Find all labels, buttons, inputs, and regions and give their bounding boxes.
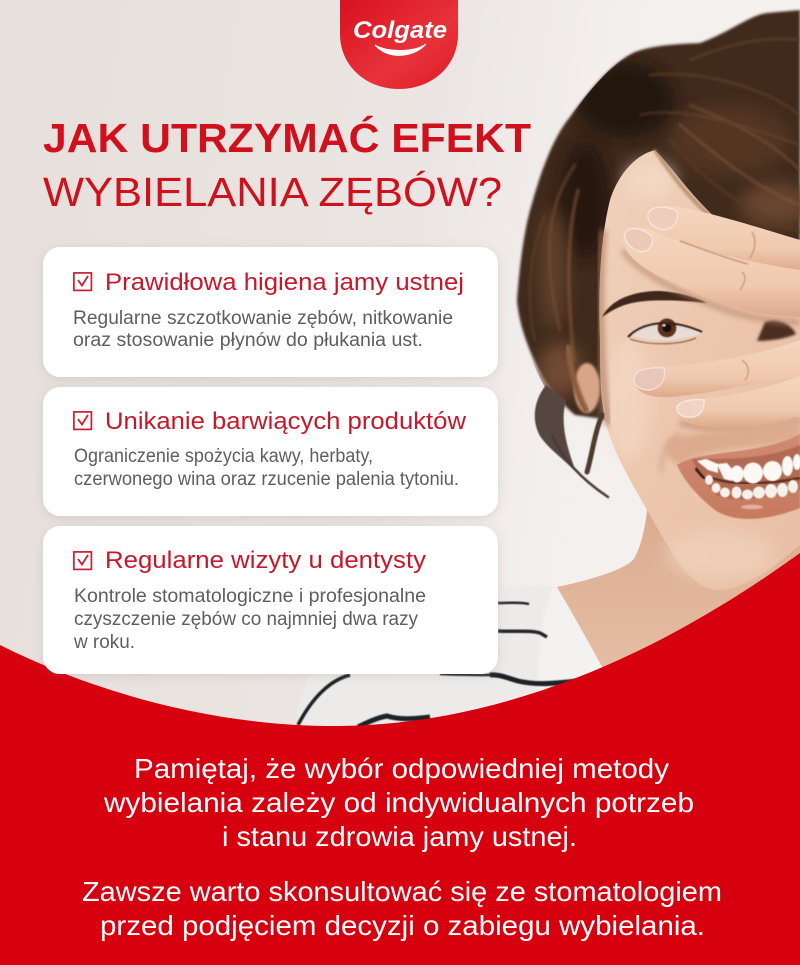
text block: czyszczenie zębów co najmniej dwa razy: [74, 609, 418, 630]
eyebrow: [602, 291, 707, 317]
text block: Ograniczenie spożycia kawy, herbaty,: [74, 446, 373, 467]
face: [599, 150, 800, 590]
heading: Prawidłowa higiena jamy ustnej: [105, 269, 464, 296]
skin above the lip: [666, 418, 800, 465]
icon: checkbox: [74, 412, 91, 429]
closing text: choice of method: [103, 753, 694, 852]
gap between the fingers: [757, 320, 796, 341]
closing text: consult a dentist: Zawsze warto skonsultować się ze stomatologiem: [82, 876, 722, 907]
text block: czerwonego wina oraz rzucenie palenia tytoniu.: [74, 469, 459, 490]
lower lip highlight: [741, 505, 763, 509]
ear and strands over it: [568, 345, 600, 413]
nails on upper fingers: [648, 207, 678, 229]
lower teeth: [705, 475, 798, 500]
photo: woman covering one eye with her hand: [295, 10, 800, 730]
upper teeth: [697, 454, 800, 484]
upper fingers: [623, 206, 800, 317]
shirt stripes: [298, 603, 577, 727]
shirt with stripes: [295, 585, 620, 730]
neck: [557, 500, 800, 672]
face shading: [606, 340, 650, 460]
text block: [73, 308, 453, 351]
closing text: choice of method: wybielania zależy od indywidualnych potrzeb: [103, 787, 694, 818]
panel: staining products: [43, 387, 498, 516]
lips: [677, 434, 800, 519]
logo badge: [340, 0, 458, 89]
icon: checkbox: [74, 552, 91, 569]
text block: w roku.: [73, 632, 135, 653]
panel: oral hygiene: [43, 247, 498, 377]
shadow under the upper fingers: [623, 250, 800, 322]
text block: Kontrole stomatologiczne i profesjonalne: [74, 586, 426, 607]
crease beside the mouth: [662, 432, 680, 472]
hair shading: [538, 62, 800, 398]
title: JAK UTRZYMAĆ EFEKT: [43, 115, 531, 161]
icon: checkbox: [74, 273, 91, 290]
smile: [662, 418, 800, 519]
text block: [74, 446, 459, 490]
mouth interior: [692, 445, 800, 499]
title: WYBIELANIA ZĘBÓW?: [43, 169, 502, 215]
nails on lower fingers: [634, 368, 664, 390]
text block: oraz stosowanie płynów do płukania ust.: [73, 330, 423, 351]
text block: [73, 586, 426, 653]
text block: Regularne szczotkowanie zębów, nitkowanie: [73, 308, 453, 329]
hair mass: [517, 10, 800, 420]
title: [43, 115, 531, 215]
closing text: consult a dentist: [82, 876, 722, 941]
panel: dentist visits: [43, 526, 498, 674]
eye: [628, 318, 702, 344]
shadow under the lower fingers: [680, 420, 800, 429]
closing text: choice of method: Pamiętaj, że wybór odpowiedniej metody: [134, 753, 669, 784]
logo smile: [375, 44, 426, 55]
lower fingers: [634, 340, 800, 428]
red curved panel: [0, 553, 800, 965]
closing text: consult a dentist: przed podjęciem decyzji o zabiegu wybielania.: [100, 910, 705, 941]
closing text: choice of method: i stanu zdrowia jamy ustnej.: [222, 821, 577, 852]
heading: Unikanie barwiących produktów: [105, 408, 466, 435]
heading: Regularne wizyty u dentysty: [105, 547, 427, 574]
logo wordmark: Colgate: [353, 17, 447, 44]
fringe edge and hair strands: [530, 39, 800, 360]
loose strands near the ear: [535, 385, 608, 497]
